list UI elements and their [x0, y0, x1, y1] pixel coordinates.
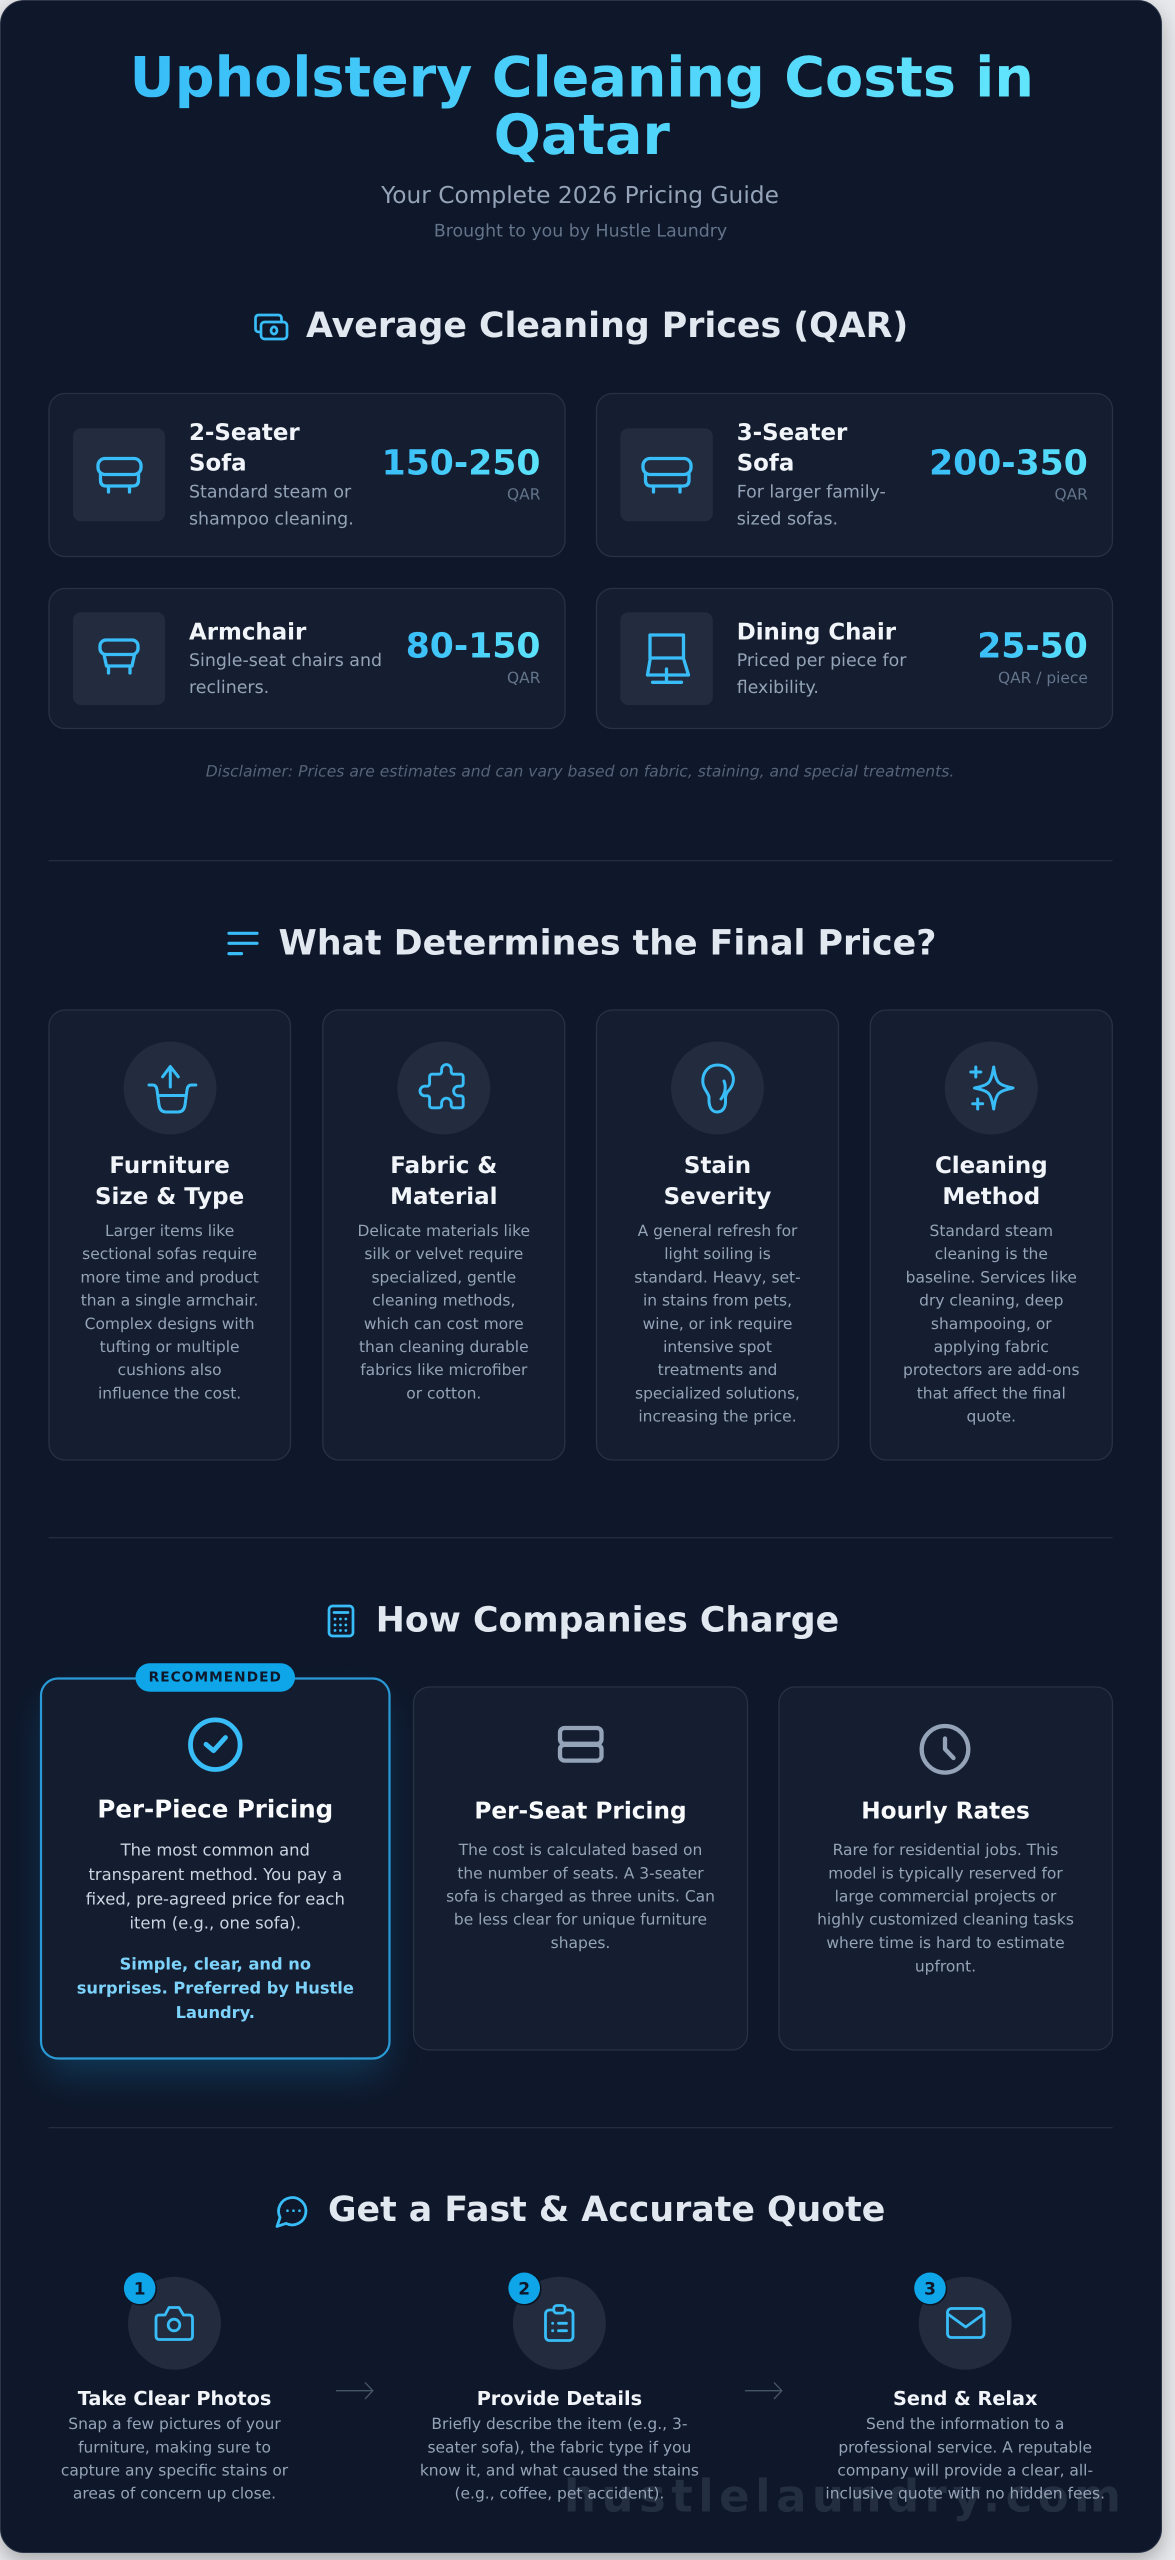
- item name: Dining Chair: [737, 619, 897, 645]
- section: average cleaning prices: [49, 306, 1112, 781]
- factor description: tufting or multiple: [100, 1338, 240, 1356]
- step 1: take clear photos: [61, 2272, 289, 2503]
- number badge 2: [508, 2272, 542, 2306]
- step heading: Take Clear Photos: [78, 2387, 271, 2410]
- method highlight: surprises. Preferred by Hustle: [77, 1979, 354, 1998]
- icon: armchair: [100, 640, 138, 673]
- method description: [86, 1841, 345, 1933]
- number badge 3: 3: [924, 2280, 936, 2300]
- method highlight: Simple, clear, and no: [120, 1954, 311, 1973]
- unit: QAR: [507, 485, 541, 503]
- factor description: [903, 1222, 1080, 1426]
- method heading: Hourly Rates: [861, 1798, 1030, 1825]
- panel: 2-seater sofa: [49, 394, 565, 556]
- icon: camera: [156, 2308, 192, 2340]
- item description: For larger family-: [737, 483, 886, 503]
- method description: [446, 1841, 715, 1952]
- item name: [737, 420, 848, 477]
- step description: Briefly describe the item (e.g., 3-: [431, 2415, 687, 2433]
- factor description: specialized solutions,: [635, 1384, 800, 1402]
- factor heading: Method: [942, 1184, 1040, 1210]
- icon: dining chair: [648, 635, 688, 682]
- number badge 3: [914, 2272, 947, 2306]
- step description: [420, 2415, 699, 2503]
- factor description: quote.: [967, 1408, 1016, 1426]
- number badge 1: 1: [134, 2280, 146, 2300]
- arrow: step 2 to step 3: [745, 2382, 782, 2399]
- step description: inclusive quote with no hidden fees.: [825, 2485, 1105, 2503]
- step 3: send and relax: [825, 2272, 1105, 2503]
- step description: seater sofa), the fabric type if you: [427, 2438, 691, 2456]
- icon: calculator: [329, 1606, 353, 1636]
- method highlight: Laundry.: [176, 2003, 255, 2022]
- icon: 2-seater sofa: [98, 458, 141, 492]
- step heading: Send & Relax: [893, 2387, 1038, 2410]
- factor description: A general refresh for: [638, 1222, 798, 1240]
- factor description: which can cost more: [364, 1315, 524, 1333]
- factor description: in stains from pets,: [643, 1292, 792, 1310]
- factor description: dry cleaning, deep: [919, 1292, 1063, 1310]
- unit: QAR: [1054, 485, 1088, 503]
- icon: furniture size: [149, 1066, 196, 1112]
- arrow: step 1 to step 2: [336, 2382, 373, 2399]
- subtitle: Your Complete 2026 Pricing Guide: [380, 182, 779, 209]
- method description: shapes.: [551, 1934, 610, 1952]
- item description: Standard steam or: [189, 483, 352, 503]
- item description: [189, 483, 354, 530]
- header: [130, 46, 1034, 242]
- factor heading: Size & Type: [95, 1184, 244, 1210]
- factor heading: Severity: [664, 1184, 771, 1210]
- price: 200-350: [929, 443, 1088, 483]
- factor description: applying fabric: [934, 1338, 1049, 1356]
- item description: flexibility.: [737, 678, 819, 698]
- factor description: [358, 1222, 530, 1402]
- factor description: standard. Heavy, set-: [634, 1268, 801, 1286]
- item description: [737, 651, 907, 698]
- heading: average cleaning prices: Average Cleaning Prices (QAR): [306, 306, 908, 346]
- item description: [189, 651, 382, 698]
- icon: stain: [703, 1065, 733, 1112]
- panel: per-seat pricing: [414, 1687, 748, 2050]
- section: what determines the final price: [49, 924, 1112, 1460]
- price: 80-150: [406, 627, 540, 667]
- factor description: influence the cost.: [98, 1384, 241, 1402]
- method description: sofa is charged as three units. Can: [446, 1888, 715, 1906]
- step heading: Provide Details: [477, 2387, 642, 2410]
- icon: seat rows: [560, 1728, 602, 1761]
- factor description: treatments and: [658, 1361, 777, 1379]
- number badge 2: 2: [518, 2280, 530, 2300]
- item description: shampoo cleaning.: [189, 510, 354, 530]
- price: 150-250: [382, 443, 540, 483]
- factor description: specialized, gentle: [372, 1268, 516, 1286]
- item name: [189, 420, 300, 477]
- factor heading: [95, 1153, 244, 1210]
- factor description: that affect the final: [917, 1384, 1066, 1402]
- step description: furniture, making sure to: [78, 2438, 271, 2456]
- title: Upholstery Cleaning Costs in: [130, 46, 1034, 111]
- icon: envelope: [948, 2308, 984, 2338]
- factor description: wine, or ink require: [643, 1315, 792, 1333]
- method description: item (e.g., one sofa).: [129, 1914, 301, 1933]
- unit: QAR: [507, 669, 541, 687]
- method description: be less clear for unique furniture: [454, 1911, 707, 1929]
- icon: clipboard: [546, 2306, 573, 2340]
- title: Qatar: [494, 103, 671, 168]
- step description: know it, and what caused the stains: [420, 2462, 699, 2480]
- method description: large commercial projects or: [835, 1888, 1057, 1906]
- factor description: cleaning methods,: [372, 1292, 515, 1310]
- item description: Single-seat chairs and: [189, 651, 382, 671]
- method description: fixed, pre-agreed price for each: [86, 1889, 345, 1908]
- method description: The cost is calculated based on: [458, 1841, 702, 1859]
- item description: Priced per piece for: [737, 651, 907, 671]
- step description: Snap a few pictures of your: [68, 2415, 281, 2433]
- icon: banknotes: [256, 315, 287, 339]
- factor description: more time and product: [80, 1268, 259, 1286]
- factor description: fabrics like microfiber: [360, 1361, 528, 1379]
- panel: armchair: [49, 588, 565, 728]
- method description: [817, 1841, 1074, 1975]
- factor description: Complex designs with: [85, 1315, 255, 1333]
- factor heading: Furniture: [109, 1153, 230, 1179]
- factor description: baseline. Services like: [906, 1268, 1077, 1286]
- factor description: shampooing, or: [931, 1315, 1052, 1333]
- icon: puzzle piece: [420, 1065, 463, 1108]
- factor description: silk or velvet require: [364, 1245, 523, 1263]
- factor heading: Fabric &: [390, 1153, 497, 1179]
- factor description: [634, 1222, 801, 1426]
- factor description: than a single armchair.: [81, 1292, 258, 1310]
- factor description: light soiling is: [664, 1245, 771, 1263]
- panel: dining chair: [596, 588, 1112, 728]
- step description: company will provide a clear, all-: [837, 2462, 1093, 2480]
- step description: areas of concern up close.: [73, 2485, 276, 2503]
- item description: sized sofas.: [737, 510, 838, 530]
- factor description: protectors are add-ons: [903, 1361, 1080, 1379]
- item name: Sofa: [189, 451, 247, 477]
- panel: stain severity: [596, 1010, 838, 1460]
- item description: [737, 483, 886, 530]
- method description: model is typically reserved for: [828, 1864, 1063, 1882]
- factor description: [80, 1222, 259, 1402]
- panel: per-piece pricing: [41, 1663, 390, 2058]
- item name: 3-Seater: [737, 420, 848, 446]
- factor heading: [935, 1153, 1048, 1210]
- method highlight: [77, 1954, 354, 2022]
- icon: check circle: [190, 1720, 240, 1769]
- factor description: sectional sofas require: [82, 1245, 257, 1263]
- disclaimer: Disclaimer: Prices are estimates and can vary based on fabric, staining, and special treatments.: [206, 763, 954, 781]
- step description: capture any specific stains or: [61, 2462, 289, 2480]
- factor description: cleaning is the: [935, 1245, 1048, 1263]
- step description: professional service. A reputable: [838, 2438, 1092, 2456]
- panel: fabric and material: [323, 1010, 565, 1460]
- badge: recommended: RECOMMENDED: [149, 1670, 282, 1686]
- method description: where time is hard to estimate: [826, 1934, 1065, 1952]
- method heading: Per-Piece Pricing: [97, 1794, 333, 1823]
- factor heading: Material: [390, 1184, 497, 1210]
- method description: highly customized cleaning tasks: [817, 1911, 1074, 1929]
- factor description: cushions also: [118, 1361, 222, 1379]
- icon: sparkles: [971, 1067, 1013, 1109]
- item name: Armchair: [189, 619, 307, 645]
- panel: cleaning method: [870, 1010, 1112, 1460]
- factor description: Standard steam: [930, 1222, 1053, 1240]
- item description: recliners.: [189, 678, 269, 698]
- step description: (e.g., coffee, pet accident).: [455, 2485, 664, 2503]
- heading: get a quote: Get a Fast & Accurate Quote: [328, 2190, 885, 2230]
- icon: chat bubble: [277, 2198, 306, 2226]
- icon: 3-seater sofa: [643, 458, 691, 492]
- factor description: or cotton.: [406, 1384, 481, 1402]
- item name: 2-Seater: [189, 420, 300, 446]
- step description: [825, 2415, 1105, 2503]
- icon: filter lines: [229, 933, 257, 954]
- panel: furniture size and type: [49, 1010, 290, 1460]
- method description: The most common and: [120, 1841, 310, 1860]
- factor description: Delicate materials like: [358, 1222, 530, 1240]
- section: how companies charge: [41, 1601, 1112, 2075]
- icon: clock: [922, 1726, 968, 1773]
- step description: [61, 2415, 289, 2503]
- heading: what determines the final price: What Determines the Final Price?: [278, 924, 936, 964]
- price: 25-50: [977, 627, 1088, 667]
- step 2: provide details: [420, 2272, 699, 2503]
- glow behind recommended card: [45, 1700, 385, 2075]
- method description: Rare for residential jobs. This: [833, 1841, 1058, 1859]
- panel: hourly rates: [779, 1687, 1112, 2050]
- factor description: than cleaning durable: [359, 1338, 529, 1356]
- method description: upfront.: [915, 1957, 976, 1975]
- factor description: Larger items like: [105, 1222, 234, 1240]
- byline: Brought to you by Hustle Laundry: [434, 222, 727, 242]
- method description: the number of seats. A 3-seater: [457, 1864, 704, 1882]
- unit: QAR / piece: [998, 669, 1088, 687]
- factor heading: Stain: [684, 1153, 751, 1179]
- title: [130, 46, 1034, 168]
- factor heading: Cleaning: [935, 1153, 1048, 1179]
- section: get a fast and accurate quote: [61, 2190, 1121, 2523]
- number badge 1: [124, 2272, 157, 2306]
- panel: 3-seater sofa: [596, 394, 1112, 556]
- item name: Sofa: [737, 451, 794, 477]
- watermark: hustlelaundry.com: [564, 2470, 1121, 2523]
- method heading: Per-Seat Pricing: [474, 1798, 687, 1825]
- method description: transparent method. You pay a: [88, 1865, 342, 1884]
- badge: recommended: [136, 1663, 295, 1692]
- step description: Send the information to a: [866, 2415, 1064, 2433]
- factor heading: [390, 1153, 497, 1210]
- heading: how companies charge: How Companies Charge: [376, 1601, 839, 1641]
- factor description: increasing the price.: [638, 1408, 797, 1426]
- factor description: intensive spot: [663, 1338, 772, 1356]
- factor heading: [664, 1153, 771, 1210]
